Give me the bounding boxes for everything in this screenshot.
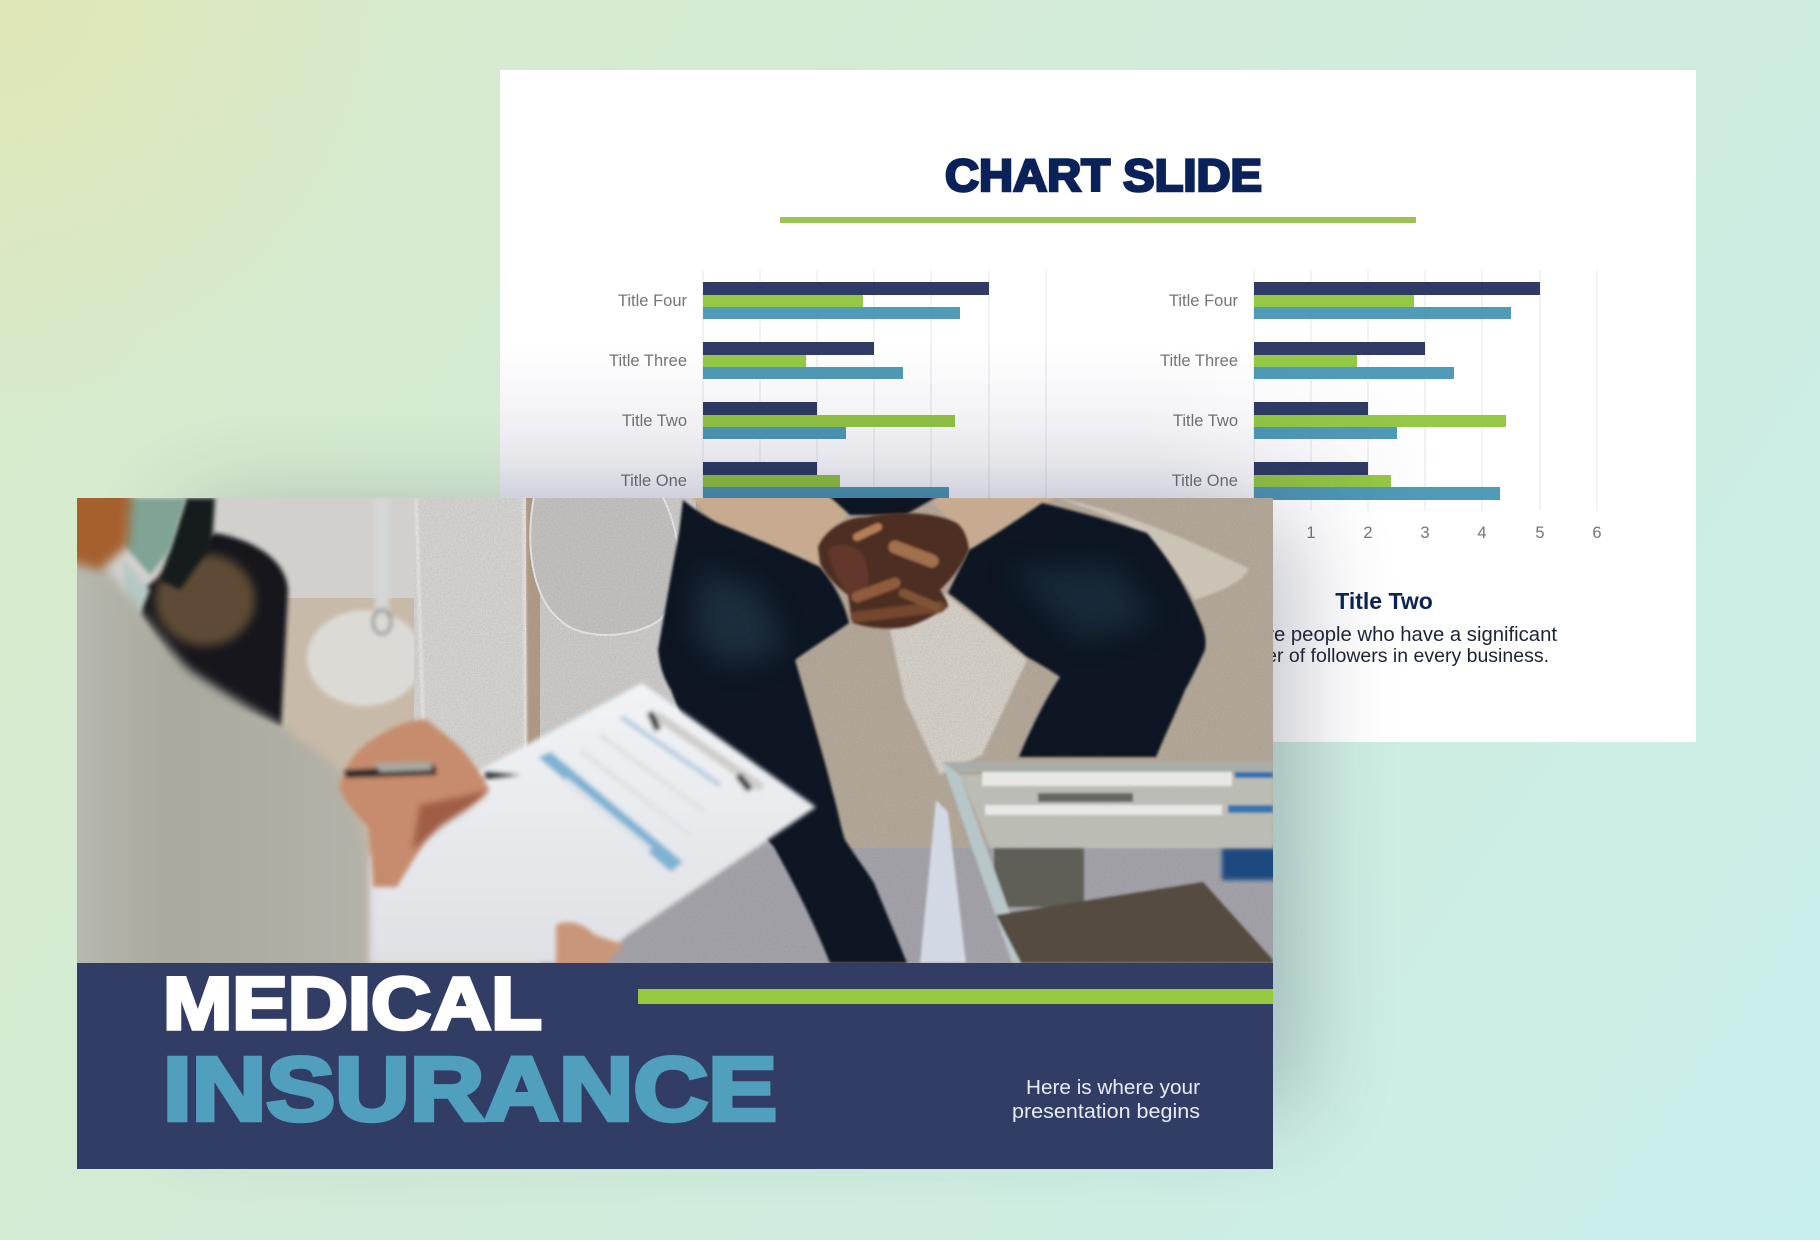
wall and floor [106, 498, 540, 963]
bar chart: right: 5 [1535, 524, 1545, 542]
glass table [920, 762, 1273, 963]
knit throw top right [1058, 498, 1248, 600]
subtitle: presentation begins [1012, 1100, 1200, 1123]
clipboard and form [368, 683, 816, 963]
subtitle [1012, 1076, 1200, 1123]
chart caption body [1151, 624, 1557, 667]
slide lower fade [500, 393, 1322, 500]
bar chart: right: Title Three [1160, 352, 1238, 370]
trousers [658, 495, 1206, 963]
panel: back chart slide [500, 70, 1696, 742]
plant pot [124, 498, 288, 727]
chart caption title: Title Two [1335, 588, 1433, 614]
book on lower shelf [996, 882, 1273, 963]
panel: front cover photo [60, 485, 1282, 975]
sofa arm, seat and pillow [414, 492, 1273, 850]
bar chart: left: Title Two [622, 412, 687, 430]
front slide shadow [190, 515, 1295, 1105]
doctor coat [60, 555, 368, 975]
floor lamp [307, 498, 423, 706]
bar chart: left: Title Three [609, 352, 687, 370]
bar chart: right: Title Two [1173, 412, 1238, 430]
bar chart: right: Title Four [1169, 292, 1238, 310]
title: insurance: INSURANCE [163, 1040, 777, 1140]
chart caption body: Influencers are people who have a significant [1151, 624, 1557, 646]
bar chart: left: Title Four [618, 292, 687, 310]
clasped hands [818, 513, 969, 628]
panel: cover banner [77, 962, 1273, 1169]
bar chart: right: 3 [1420, 524, 1430, 542]
chart caption body: number of followers in every business. [1217, 645, 1549, 667]
title: medical: MEDICAL [163, 962, 542, 1045]
heading: chart slide: CHART SLIDE [945, 150, 1262, 201]
bar chart: left: Title One [621, 472, 687, 490]
bar chart: right: Title One [1172, 472, 1238, 490]
green accent bar [638, 989, 1273, 1004]
trouser highlights [695, 565, 1155, 665]
holding hand [556, 922, 625, 970]
hair [77, 498, 139, 576]
heading underline [780, 217, 1416, 223]
bar chart: right [1160, 270, 1602, 542]
bar chart: left [609, 270, 1046, 511]
writing hand and pen [339, 720, 520, 887]
bar chart: right: 1 [1306, 524, 1316, 542]
knit throw on lap [890, 593, 1027, 775]
sweater sleeves [691, 498, 1056, 568]
bar chart: right: 2 [1363, 524, 1373, 542]
carpet [540, 840, 1273, 963]
bar chart: right: 6 [1592, 524, 1602, 542]
bar chart: right: 4 [1477, 524, 1487, 542]
subtitle: Here is where your [1026, 1076, 1200, 1099]
